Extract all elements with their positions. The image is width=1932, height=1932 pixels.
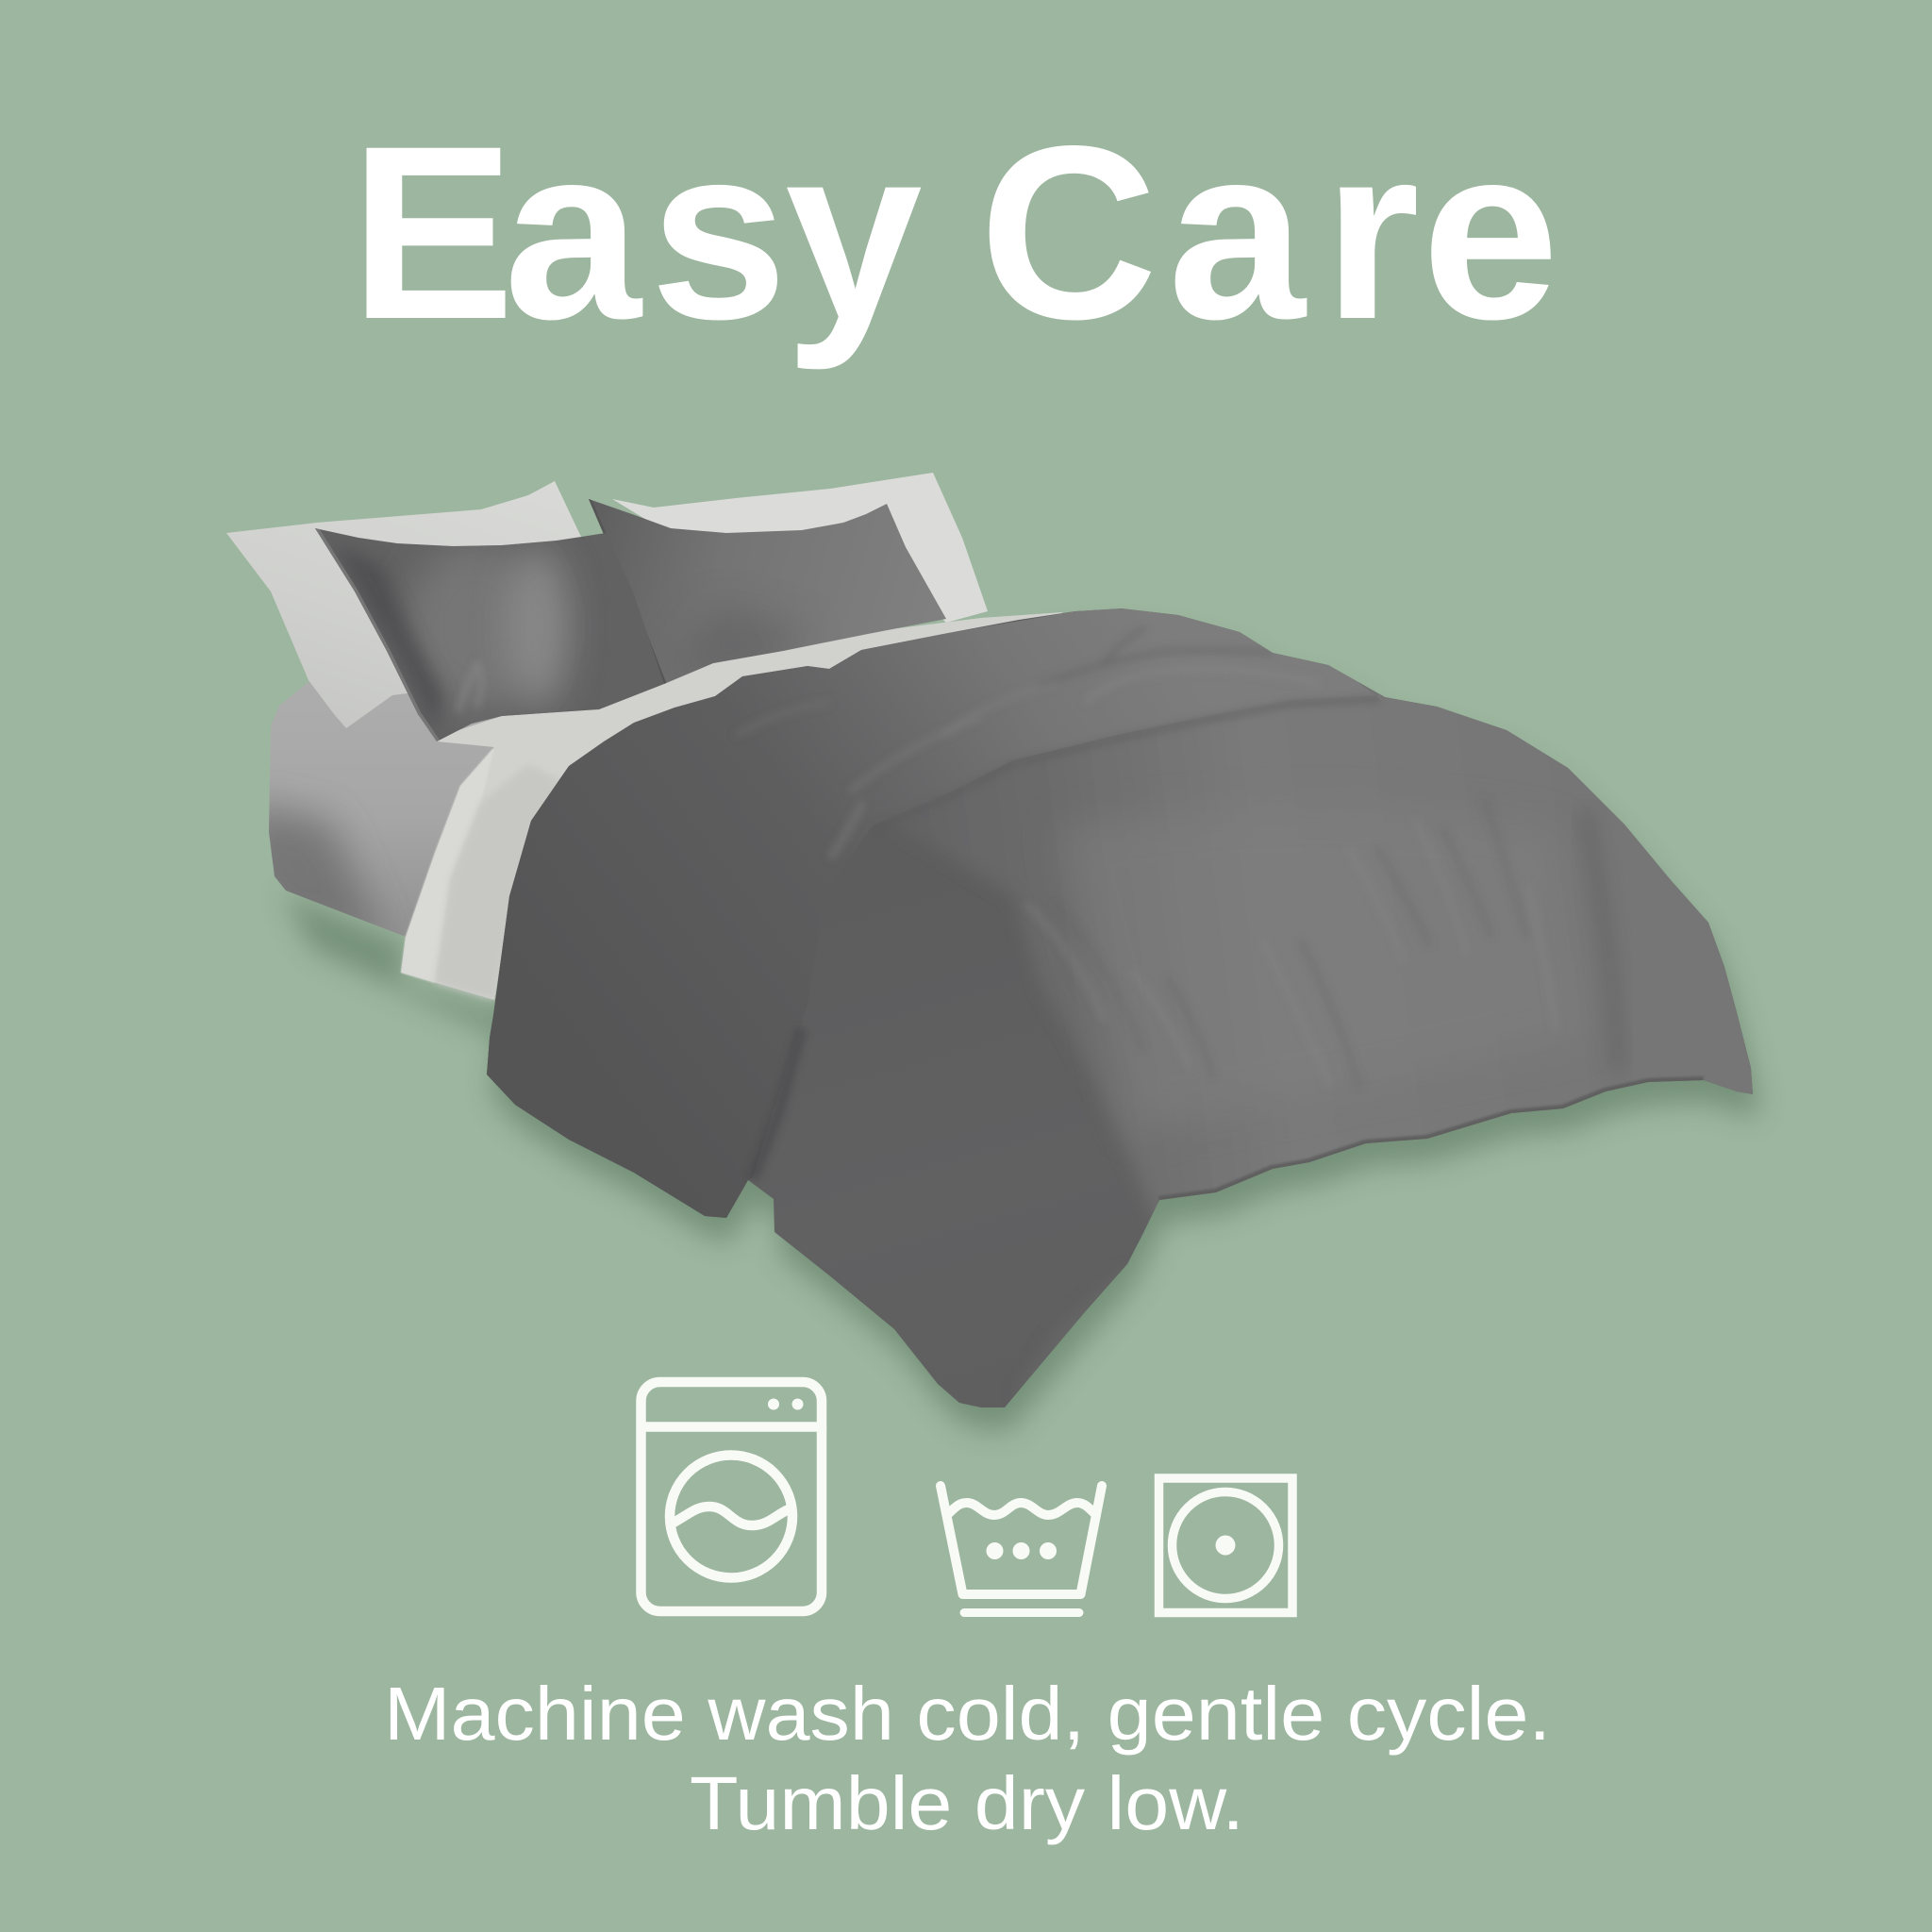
right flap crease: [1585, 811, 1619, 1071]
washer water wave: [674, 1507, 789, 1525]
fold line shadow: [1181, 697, 1377, 726]
drop panel tip highlight: [1014, 1269, 1132, 1396]
left pillow crescent shade: [341, 549, 447, 721]
basin outline: [941, 1486, 1102, 1594]
basin water line: [949, 1503, 1094, 1515]
back white pillow left: [226, 481, 660, 728]
top fold creases: [831, 649, 1259, 856]
comforter: [472, 604, 1792, 1415]
comforter left panel and top fold: [472, 608, 1385, 1222]
right pillow lower shade: [687, 611, 791, 675]
washer body: [641, 1382, 822, 1611]
left pillow lower streaks: [458, 666, 480, 708]
sheet fold strip: [401, 747, 494, 983]
right pillow seam: [589, 499, 664, 684]
washer drum: [670, 1455, 792, 1577]
icon: wash basin three dots: [941, 1486, 1102, 1613]
comforter main panel: [941, 682, 1753, 1211]
bed drop shadow: [283, 631, 1758, 1430]
icon: tumble dry low: [1158, 1478, 1292, 1613]
grey pillow left: [311, 524, 670, 745]
fitted sheet mattress side: [269, 681, 498, 937]
basin dots: [987, 1542, 1057, 1559]
sheet shaded inner area: [435, 764, 566, 1000]
washer button right: [792, 1398, 804, 1409]
icon: washing machine: [641, 1382, 822, 1611]
left pillow mid tone: [408, 545, 516, 713]
bed illustration: [226, 473, 1792, 1430]
washer button left: [768, 1398, 779, 1409]
dryer dot: [1215, 1536, 1236, 1555]
white flat sheet: [401, 612, 1062, 1000]
care instructions line two: Tumble dry low.: [690, 1761, 1244, 1845]
main panel wrinkles: [1028, 802, 1557, 1085]
care instructions line one: Machine wash cold, gentle cycle.: [384, 1672, 1551, 1756]
comforter drop panel: [472, 604, 1792, 1415]
title: Easy Care: [350, 94, 1559, 372]
left pillow highlight arc: [506, 547, 570, 708]
basin underline: [964, 1608, 1079, 1617]
panel dark crease: [753, 1028, 802, 1179]
mattress dark corner: [269, 791, 389, 929]
back white pillow right: [612, 473, 988, 623]
dryer square: [1158, 1478, 1292, 1613]
grey pillow right: [589, 499, 946, 684]
main panel soft highlight: [1085, 847, 1151, 1035]
left pillow seam: [315, 528, 437, 741]
washer panel line: [641, 1422, 822, 1432]
hem seam: [1159, 1083, 1704, 1203]
dryer circle: [1172, 1492, 1279, 1598]
